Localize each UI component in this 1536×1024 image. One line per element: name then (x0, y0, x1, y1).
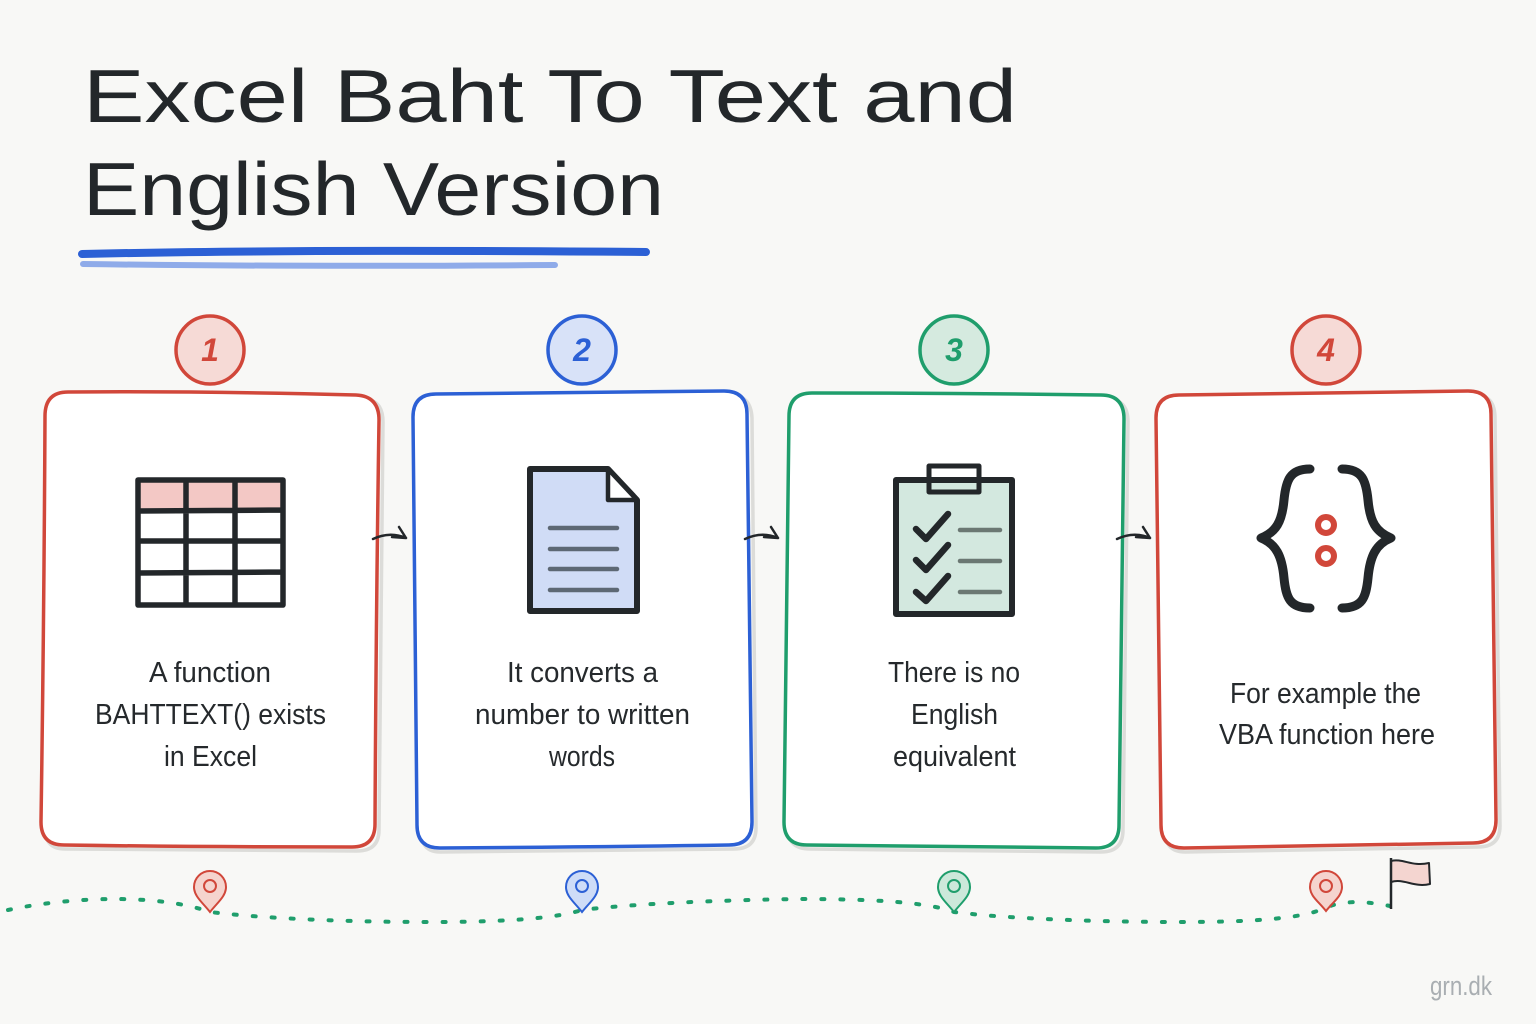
panel: step 4 (1156, 316, 1500, 852)
step 3 text: equivalent (893, 741, 1016, 773)
step 1 text: A function (149, 657, 271, 689)
card 2 (413, 391, 752, 848)
step 4 text (1219, 678, 1435, 751)
card 3 (784, 393, 1124, 848)
step 1 text (95, 657, 326, 773)
title (83, 54, 1017, 231)
icon: clipboard checklist (896, 466, 1012, 614)
card 4 (1156, 391, 1496, 848)
watermark: grn.dk (1430, 971, 1492, 1001)
panel: step 3 (784, 316, 1128, 852)
badge 4: 4 (1316, 332, 1335, 368)
icon: finish flag (1391, 858, 1430, 909)
panel: step 1 (41, 316, 383, 851)
title: Excel Baht To Text and (83, 54, 1017, 138)
step 3 text (888, 657, 1020, 773)
badge 2 (548, 316, 616, 384)
dotted journey path (8, 899, 1390, 922)
step 4 text: For example the (1230, 678, 1421, 710)
step 3 text: There is no (888, 657, 1020, 689)
arrow: step 2 to 3 (745, 527, 778, 539)
title: English Version (83, 147, 664, 231)
pin 3 (938, 871, 970, 912)
step 1 text: in Excel (164, 741, 257, 773)
badge 4 (1292, 316, 1360, 384)
panel: step 2 (413, 316, 756, 852)
badge 1 (176, 316, 244, 384)
title underline (82, 251, 646, 266)
badge 3: 3 (945, 332, 963, 368)
step 1 text: BAHTTEXT() exists (95, 699, 326, 731)
icon: document (530, 469, 637, 611)
badge 2: 2 (572, 332, 591, 368)
step 2 text: number to written (475, 699, 690, 731)
step 2 text (475, 657, 690, 773)
icon: table (138, 480, 283, 605)
pin 4 (1310, 871, 1342, 911)
step 2 text: It converts a (507, 657, 659, 689)
badge 1: 1 (201, 332, 219, 368)
badge 3 (920, 316, 988, 384)
icon: curly braces (1261, 469, 1391, 608)
step 3 text: English (911, 699, 998, 731)
card 1 (41, 392, 379, 847)
arrow: step 1 to 2 (373, 527, 406, 539)
step 2 text: words (548, 741, 615, 773)
pin 2 (566, 871, 598, 912)
step 4 text: VBA function here (1219, 719, 1435, 751)
pin 1 (194, 871, 226, 912)
arrow: step 3 to 4 (1117, 527, 1150, 539)
